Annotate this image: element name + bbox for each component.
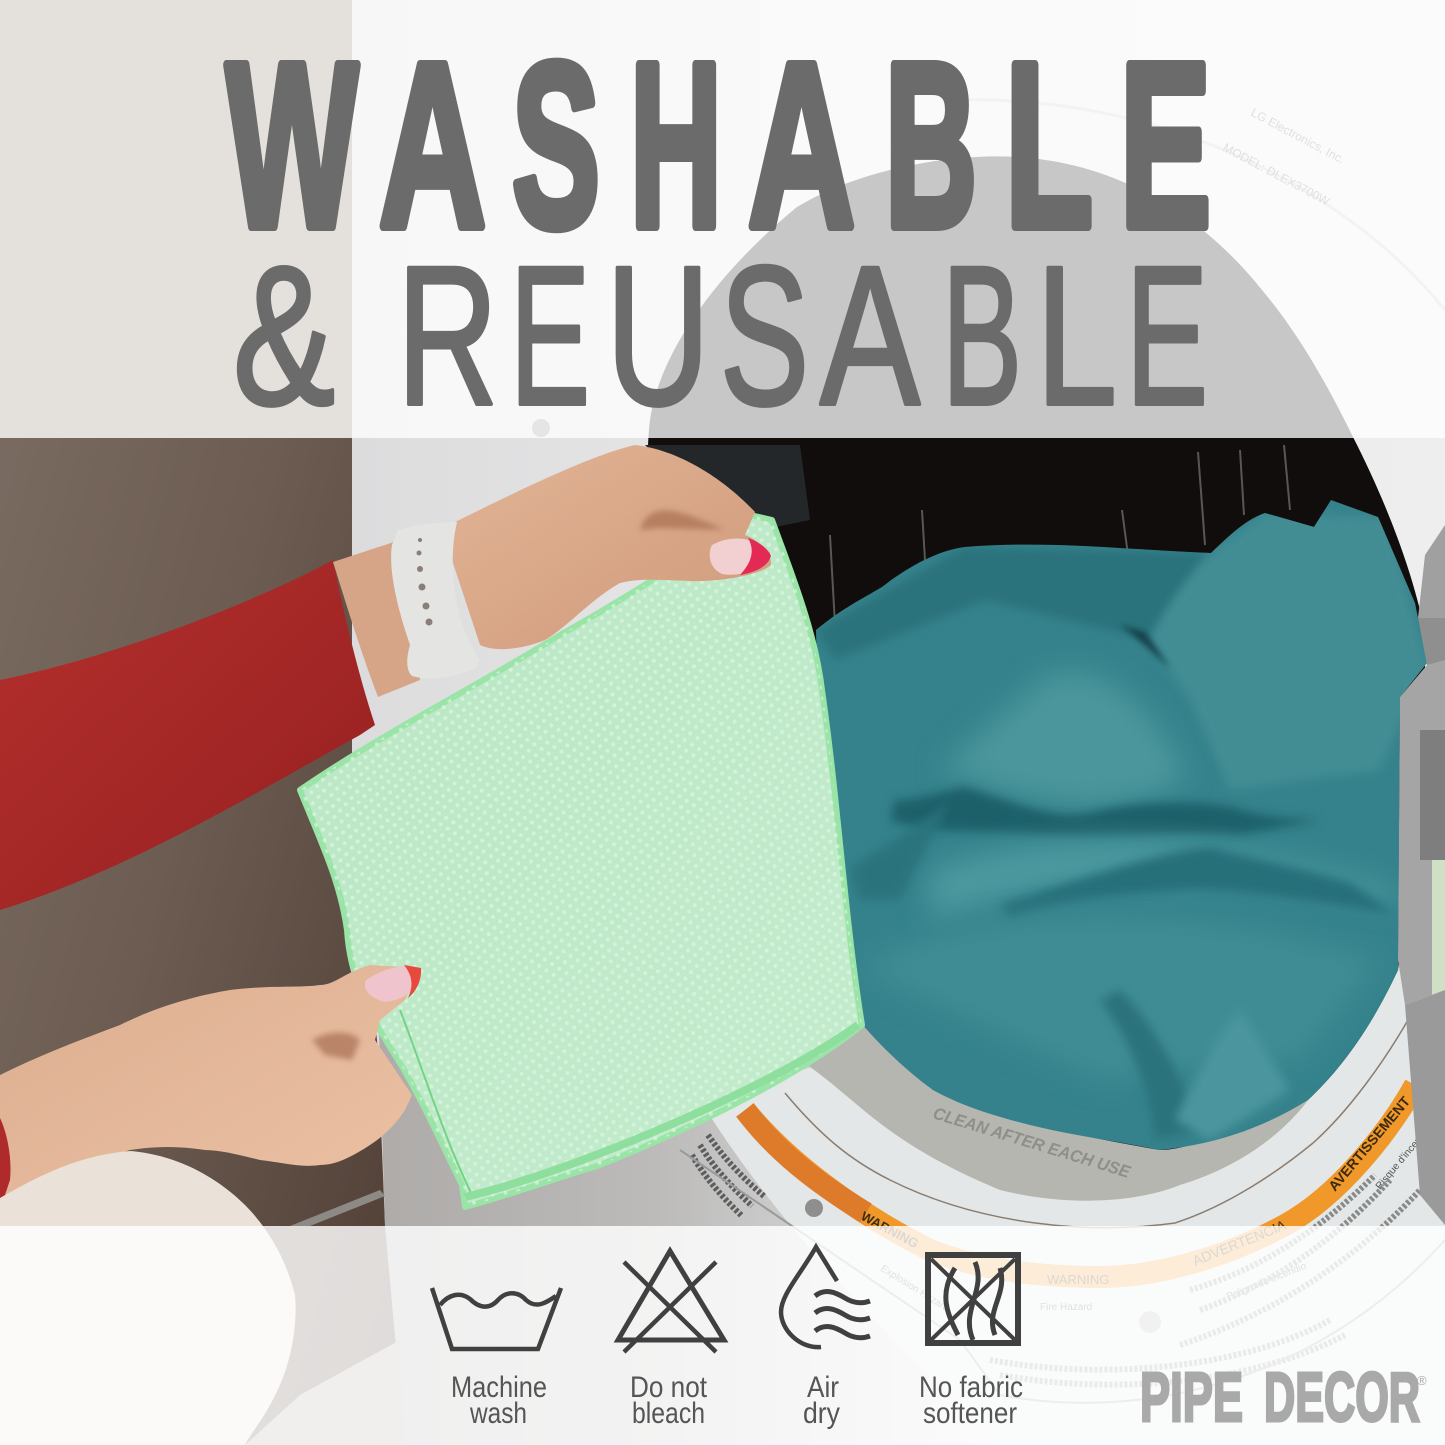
warning label fine print: Peligro de incendio (1225, 1261, 1308, 1303)
label: no fabric softener: softener (923, 1397, 1017, 1430)
label: do not bleach: bleach (632, 1397, 705, 1430)
icon: do not bleach (618, 1251, 724, 1352)
warning label band: ADVERTENCIA (1190, 1216, 1289, 1269)
warning label band (745, 1085, 1415, 1287)
warning label band: WARNING (1047, 1272, 1109, 1287)
header translucent band (0, 0, 1445, 438)
title (226, 14, 1211, 446)
white chair (0, 1151, 296, 1445)
upper nail (710, 538, 771, 575)
title line 2: & REUSABLE: & (233, 225, 335, 446)
filter lettering: CLEAN AFTER EACH USE (931, 1104, 1133, 1182)
title line 2: & REUSABLE: L (1036, 225, 1117, 446)
title line 2: & REUSABLE: A (820, 225, 920, 446)
brand logo (1140, 1358, 1427, 1436)
label: machine wash (451, 1371, 547, 1430)
watch band holes (416, 538, 432, 626)
title line 2: & REUSABLE (233, 225, 1208, 446)
label: no fabric softener: No fabric (919, 1371, 1023, 1404)
title line 2: & REUSABLE: R (397, 225, 498, 446)
warning label fine print (680, 1124, 1445, 1403)
title line 1: WASHABLE: E (1120, 14, 1211, 276)
lower nail (365, 966, 420, 1002)
brand logo: ® (1417, 1373, 1427, 1388)
title line 1: WASHABLE: B (885, 14, 977, 276)
warning label fine print: Fire Hazard (1040, 1302, 1092, 1313)
forearm skin above sleeve cuff (333, 540, 420, 697)
footer translucent band (0, 1226, 1445, 1445)
drum ribs (830, 445, 1290, 625)
green cloth (300, 515, 862, 1207)
finger gap (312, 1032, 360, 1060)
right door frame (1398, 525, 1445, 1225)
icon: machine wash (432, 1288, 561, 1349)
finger crease (640, 511, 725, 530)
title line 1: WASHABLE (226, 14, 1211, 276)
title line 1: WASHABLE: S (512, 14, 600, 276)
lint filter ring (800, 1020, 1312, 1201)
warning label band: AVERTISSEMENT (1325, 1093, 1413, 1194)
red sleeve upper (0, 560, 375, 910)
label: machine wash: Machine (451, 1371, 547, 1404)
title line 1: WASHABLE: W (226, 14, 358, 276)
title line 1: WASHABLE: H (630, 14, 722, 276)
warning label fine print: Explosion Hazard (878, 1263, 951, 1314)
label: do not bleach: Do not (630, 1371, 708, 1404)
title line 2: & REUSABLE: E (510, 225, 590, 446)
title line 1: WASHABLE: A (748, 14, 855, 276)
label: machine wash: wash (469, 1397, 527, 1430)
label: air dry: dry (803, 1397, 840, 1430)
upper hand (452, 445, 771, 649)
title line 2: & REUSABLE: U (606, 225, 710, 446)
warning label band: WARNING (859, 1208, 921, 1251)
towel shading (816, 513, 1427, 1140)
inner scratch line on ring (785, 1020, 1408, 1228)
label: air dry (803, 1371, 840, 1430)
drum interior shelf (645, 445, 810, 530)
dryer drum opening (648, 156, 1428, 1160)
wall (0, 0, 400, 1445)
smartwatch band (391, 522, 480, 678)
lower hand and forearm (0, 965, 421, 1205)
upper wall tone (0, 0, 352, 438)
teal towel (816, 500, 1427, 1150)
lower dryer side shade (378, 1000, 1000, 1445)
baseboard (290, 1190, 385, 1226)
title line 2: & REUSABLE: S (720, 225, 809, 446)
title line 2: & REUSABLE: E (1126, 225, 1208, 446)
lower red cuff (0, 1118, 11, 1210)
rivet (532, 419, 550, 437)
warning label fine print: Risque d'incendie (1374, 1124, 1433, 1192)
title line 1: WASHABLE: A (379, 14, 486, 276)
label: air dry: Air (807, 1371, 839, 1404)
brand logo: PIPE (1140, 1358, 1243, 1436)
icon: no fabric softener (928, 1255, 1018, 1343)
photo background: laundry scene: MODEL: DLEX3700W (1221, 140, 1333, 209)
label: no fabric softener (919, 1371, 1023, 1430)
faint outer door ring (960, 100, 1445, 310)
label: do not bleach (630, 1371, 708, 1430)
dryer body (352, 0, 1445, 1445)
icon: air dry (781, 1247, 870, 1347)
title line 1: WASHABLE: L (1005, 14, 1093, 276)
dryer front lower ring (700, 880, 1445, 1445)
care instructions row (432, 1247, 1023, 1430)
small serial label text on rim: LG Electronics, Inc. (1249, 105, 1347, 166)
title line 2: & REUSABLE: B (942, 225, 1022, 446)
floor (245, 1340, 405, 1445)
